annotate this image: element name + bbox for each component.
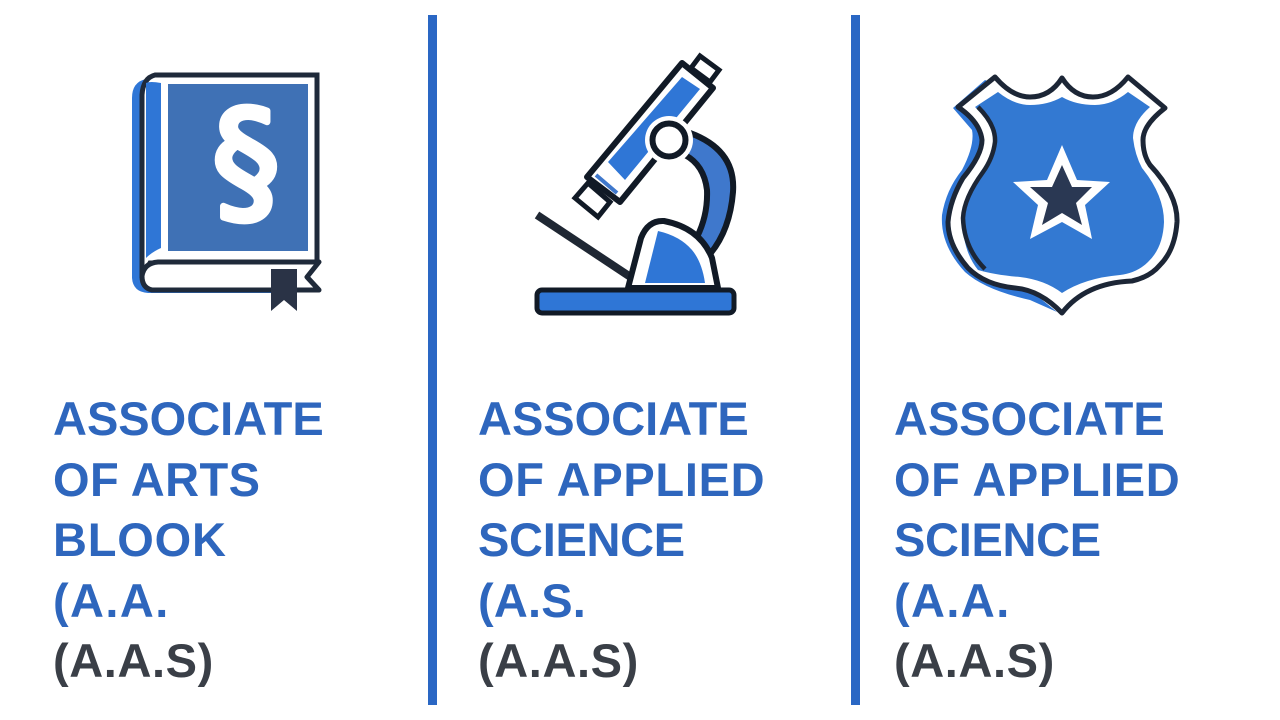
label: associate of applied science A.A.: OF APPLIED xyxy=(894,452,1180,506)
label: associate of applied science A.S.: SCIENCE xyxy=(478,513,685,566)
icon: microscope xyxy=(537,56,734,313)
label: associate of arts: (A.A.S) xyxy=(53,634,214,687)
label: associate of applied science A.A.: (A.A. xyxy=(894,574,1011,626)
divider right xyxy=(851,15,860,705)
label: associate of applied science A.S.: ASSOCIATE xyxy=(478,392,749,445)
label: associate of arts: OF ARTS xyxy=(53,452,260,506)
label: associate of applied science A.A.: SCIENCE xyxy=(894,513,1101,566)
label: associate of applied science A.A. xyxy=(894,392,1180,687)
section sign: § xyxy=(212,83,280,241)
label: associate of applied science A.A.: (A.A.S) xyxy=(894,634,1055,687)
label: associate of applied science A.S.: OF APPLIED xyxy=(478,452,765,506)
icon: law book xyxy=(132,75,319,311)
label: associate of arts: (A.A. xyxy=(53,574,170,626)
label: associate of applied science A.S.: (A.A.S) xyxy=(478,634,639,687)
label: associate of arts xyxy=(53,392,324,687)
label: associate of applied science A.S.: (A.S. xyxy=(478,574,586,626)
divider left xyxy=(428,15,437,705)
label: associate of arts: ASSOCIATE xyxy=(53,392,324,445)
icon: shield badge xyxy=(942,77,1177,313)
label: associate of applied science A.S. xyxy=(478,392,765,687)
label: associate of applied science A.A.: ASSOCIATE xyxy=(894,392,1165,445)
label: associate of arts: BLOOK xyxy=(53,513,227,566)
